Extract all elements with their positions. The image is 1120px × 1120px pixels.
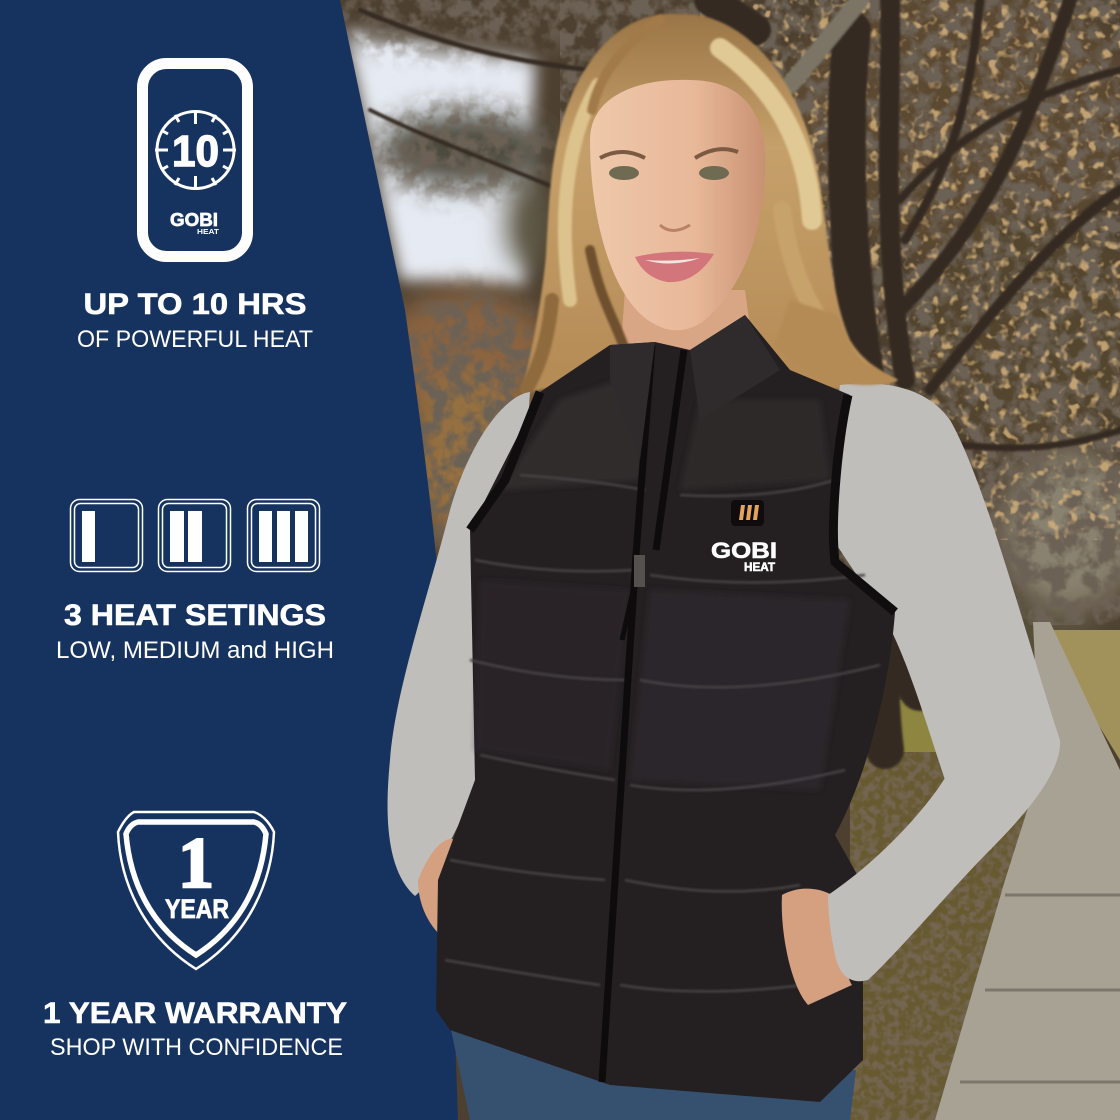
icon: battery with clock: HEAT <box>197 229 220 236</box>
heading: UP TO 10 HRS <box>84 288 306 321</box>
vest quilting <box>445 475 880 991</box>
vest body <box>436 315 895 1102</box>
blue side panel <box>0 0 458 1120</box>
vest armhole binding <box>470 392 895 612</box>
hair over shoulders <box>775 300 898 385</box>
woman photo cutout <box>388 14 1060 1120</box>
icon: battery with clock: 10 <box>172 127 219 176</box>
icon: battery with clock <box>142 64 248 256</box>
vest panel shading <box>475 370 850 790</box>
foliage masses <box>375 0 1120 690</box>
vest logo: HEAT <box>744 560 776 574</box>
foliage texture <box>340 0 580 560</box>
jeans <box>450 1025 856 1120</box>
grass <box>850 690 1040 1120</box>
tree trunks and branches <box>360 0 1120 750</box>
feature: heat settings <box>56 500 334 664</box>
subheading: SHOP WITH CONFIDENCE <box>50 1034 343 1061</box>
right upper sleeve <box>820 383 1060 850</box>
left sleeve <box>388 392 530 896</box>
icon: shield <box>118 812 274 969</box>
hair back <box>522 14 898 392</box>
icon: shield: 1 <box>178 823 214 903</box>
photo background: autumn trees and sidewalk <box>340 0 1120 1120</box>
collar <box>610 315 780 460</box>
vest logo: GOBI <box>711 538 777 563</box>
face <box>590 80 765 330</box>
heading: 3 HEAT SETINGS <box>64 599 326 632</box>
subheading: LOW, MEDIUM and HIGH <box>56 637 334 664</box>
feature: warranty <box>43 812 347 1061</box>
heading: 1 YEAR WARRANTY <box>43 997 347 1030</box>
right hand <box>782 889 852 1005</box>
subheading: OF POWERFUL HEAT <box>77 326 313 353</box>
feature: 10 hour battery <box>77 64 313 353</box>
sky <box>345 30 535 285</box>
neck <box>620 290 755 400</box>
left hand <box>418 839 455 935</box>
icon: three heat level boxes <box>70 500 320 572</box>
icon: shield: YEAR <box>165 894 229 924</box>
vest logo <box>711 538 777 574</box>
facial features <box>600 149 738 282</box>
icon: battery with clock: GOBI <box>170 210 218 230</box>
sidewalk <box>935 622 1120 1120</box>
hair strands front <box>527 20 860 388</box>
zipper <box>602 345 684 1082</box>
right forearm <box>828 778 992 981</box>
power button <box>731 500 764 526</box>
